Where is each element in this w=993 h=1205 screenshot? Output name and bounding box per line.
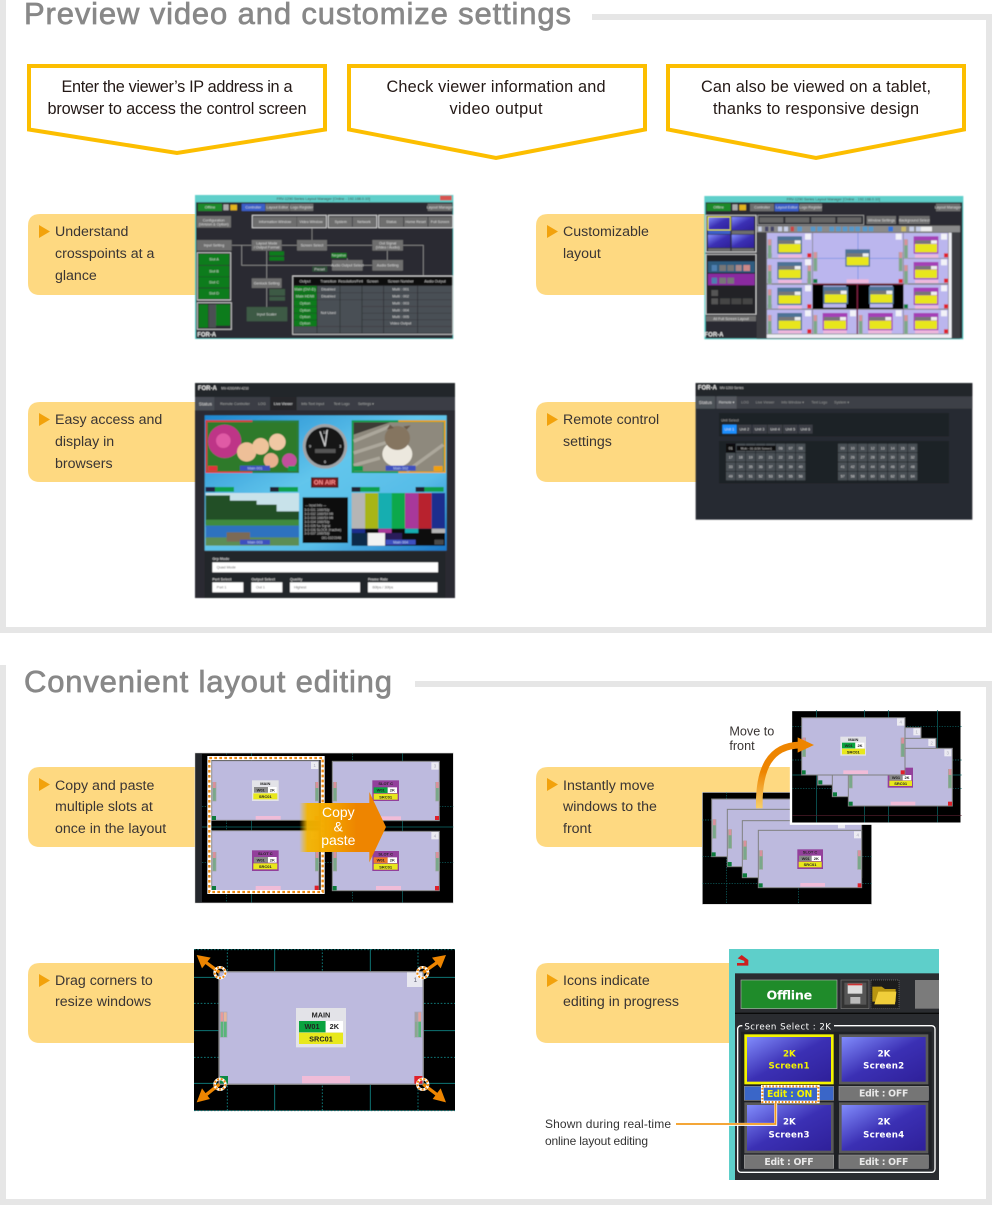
screenshot: remote control settings: 10 xyxy=(851,446,855,450)
screenshot: screen select with edit indicator: Screen Select : 2K xyxy=(744,1023,831,1033)
screenshot: remote control settings: 14 xyxy=(891,446,895,450)
screenshot: remote control settings: 29 xyxy=(881,456,885,460)
label: copy and paste xyxy=(28,767,210,847)
screenshot: move window to front: W01 xyxy=(802,856,811,861)
screenshot: layout editor screen: Layout Manager xyxy=(935,206,962,210)
label: remote control: Remote control xyxy=(563,412,659,428)
screenshot: copy and paste slots: W01 xyxy=(377,788,386,793)
panel: layout editing section frame xyxy=(3,665,989,1202)
screenshot: move window to front xyxy=(702,710,962,904)
screenshot: remote control settings: 23 xyxy=(789,456,793,460)
screenshot: remote control settings: 15 xyxy=(901,446,905,450)
screenshot: layout editor screen: FRV-1290 Series Layout Manager [Online - 192.168.0.10] xyxy=(787,197,880,201)
label: easy access: browsers xyxy=(55,456,113,472)
label: icons indicate editing: Icons indicate xyxy=(563,973,650,989)
screenshot: controller crosspoint screen: Status xyxy=(386,220,397,224)
screenshot: remote control settings: Unit 4 xyxy=(770,428,780,432)
screenshot: copy and paste slots: Copy xyxy=(322,804,355,820)
screenshot: controller crosspoint screen: Main (DVI-D) xyxy=(294,288,316,292)
screenshot: controller crosspoint screen: Preset xyxy=(314,267,325,271)
screenshot: browser live viewer: Remote Controller xyxy=(220,402,251,406)
screenshot: remote control settings: 42 xyxy=(851,465,855,469)
screenshot: browser live viewer: Port 1 xyxy=(217,586,226,590)
screenshot: controller crosspoint screen: Logo Register xyxy=(290,206,314,210)
screenshot: remote control settings: 07 xyxy=(789,446,793,450)
screenshot: move window to front: 2K xyxy=(814,856,819,861)
label: copy and paste: Copy and paste xyxy=(55,778,154,794)
screenshot: controller crosspoint screen: Controller xyxy=(245,206,262,210)
screenshot: controller crosspoint screen: Option xyxy=(300,302,310,306)
screenshot: controller crosspoint screen: Video Output xyxy=(390,322,411,326)
screenshot: controller crosspoint screen: Slot D xyxy=(209,292,219,296)
screenshot: copy and paste slots: 2K xyxy=(270,787,275,792)
screenshot: remote control settings: FOR-A xyxy=(698,386,717,392)
screenshot: copy and paste slots: SRC01 xyxy=(259,794,273,799)
screenshot: remote control settings: 21 xyxy=(769,456,773,460)
screenshot: controller crosspoint screen: / Output Format xyxy=(254,246,279,250)
callout: enter IP address: browser to access the control screen xyxy=(48,100,306,118)
screenshot: remote control settings: Live Viewer xyxy=(756,401,775,405)
screenshot: controller crosspoint screen: Audio Output xyxy=(424,280,446,284)
screenshot: controller crosspoint screen xyxy=(195,195,454,339)
screenshot: copy and paste slots: 4 xyxy=(434,833,437,838)
screenshot: remote control settings: 30 xyxy=(891,456,895,460)
screenshot: remote control settings: 62 xyxy=(891,474,895,478)
screenshot: browser live viewer: Settings ▾ xyxy=(358,402,374,406)
screenshot: remote control settings: 22 xyxy=(779,456,783,460)
screenshot: copy and paste slots: W01 xyxy=(257,857,266,862)
screenshot: browser live viewer: FOR-A xyxy=(198,386,217,392)
screenshot: remote control settings: 11 xyxy=(861,446,865,450)
callout: check viewer information: Check viewer information and xyxy=(386,78,606,96)
screenshot: controller crosspoint screen: Full Screen xyxy=(431,220,449,224)
screenshot: browser live viewer: ON AIR xyxy=(314,480,336,487)
label: understand crosspoints xyxy=(28,214,210,295)
label: icons indicate editing xyxy=(536,963,740,1043)
screenshot: copy and paste slots: SLOT C xyxy=(378,781,393,786)
screenshot: remote control settings: 08 xyxy=(799,446,803,450)
screenshot: controller crosspoint screen: Audio Output Select xyxy=(331,264,364,268)
label: instantly move windows: Instantly move xyxy=(563,778,655,794)
screenshot: remote control settings: Unit 6 xyxy=(801,428,810,432)
screenshot: browser live viewer: Quality xyxy=(290,577,303,581)
screenshot: copy and paste slots: SRC01 xyxy=(379,864,393,869)
screenshot: drag corners to resize: W01 xyxy=(304,1022,320,1031)
screenshot: remote control settings: 36 xyxy=(759,465,763,469)
screenshot: controller crosspoint screen: Slot B xyxy=(209,269,219,273)
screenshot: remote control settings: 54 xyxy=(779,474,783,478)
screenshot: controller crosspoint screen: Multi : 003 xyxy=(392,302,409,306)
screenshot: browser live viewer: Status xyxy=(199,401,213,406)
screenshot: copy and paste slots: SLOT C xyxy=(258,851,273,856)
screenshot: remote control settings: 44 xyxy=(871,465,875,469)
screenshot: remote control settings: 55 xyxy=(789,474,793,478)
screenshot: move window to front: SRC01 xyxy=(804,862,817,867)
screenshot: drag corners to resize: MAIN xyxy=(312,1010,330,1019)
screenshot: screen select with edit indicator: Screen2 xyxy=(863,1061,904,1071)
screenshot: screen select with edit indicator: Edit : OFF xyxy=(764,1157,814,1168)
screenshot: remote control settings xyxy=(696,383,972,520)
screenshot: remote control settings: 31 xyxy=(901,456,905,460)
screenshot: move window to front: 2K xyxy=(857,743,863,748)
screenshot: controller crosspoint screen: FOR-A xyxy=(197,333,217,339)
screenshot: controller crosspoint screen: Multi : 005 xyxy=(392,315,409,319)
screenshot: remote control settings: 35 xyxy=(749,465,753,469)
screenshot: remote control settings: 58 xyxy=(851,474,855,478)
screenshot: layout editor screen: Offline xyxy=(713,206,724,210)
screenshot: move window to front: 3 xyxy=(946,751,949,756)
screenshot: remote control settings: 57 xyxy=(841,474,845,478)
screenshot: remote control settings: 59 xyxy=(861,474,865,478)
screenshot: screen select with edit indicator: Edit : OFF xyxy=(859,1157,908,1168)
screenshot: screen select with edit indicator: Screen3 xyxy=(768,1130,809,1140)
screenshot: browser live viewer: Text Logo xyxy=(334,402,350,406)
screenshot: screen select with edit indicator: Edit : ON xyxy=(767,1089,812,1100)
screenshot: layout editor screen: Background Select xyxy=(899,218,930,222)
screenshot: drag corners to resize: 1 xyxy=(413,977,417,984)
screenshot: copy and paste slots: W01 xyxy=(377,858,386,863)
screenshot: remote control settings: 19 xyxy=(749,456,753,460)
label: drag corners: Drag corners to xyxy=(55,973,153,989)
screenshot: remote control settings: Text Logo xyxy=(811,401,827,405)
screenshot: controller crosspoint screen: Option xyxy=(300,315,310,319)
screenshot: remote control settings: 53 xyxy=(769,474,773,478)
screenshot: screen select with edit indicator: 2K xyxy=(783,1118,796,1128)
label: remote control xyxy=(536,402,720,482)
screenshot: remote control settings: 13 xyxy=(881,446,885,450)
screenshot: browser live viewer: 001-002/2048 xyxy=(322,536,341,540)
screenshot: browser live viewer: Output Select xyxy=(251,577,276,581)
screenshot: layout editor screen: Window Settings xyxy=(868,218,895,222)
screenshot: remote control settings: 38 xyxy=(779,465,783,469)
screenshot: remote control settings: 28 xyxy=(871,456,875,460)
screenshot: copy and paste slots: 2K xyxy=(390,858,395,863)
screenshot: remote control settings: 61 xyxy=(881,474,885,478)
screenshot: screen select with edit indicator: 2K xyxy=(783,1050,796,1060)
screenshot: remote control settings: 60 xyxy=(871,474,875,478)
screenshot: remote control settings: Status xyxy=(699,400,713,405)
label: understand crosspoints: glance xyxy=(55,268,97,284)
screenshot: move window to front: 2K xyxy=(904,775,910,780)
screenshot: screen select with edit indicator: 2K xyxy=(878,1118,891,1128)
screenshot: remote control settings: 09 xyxy=(841,446,845,450)
screenshot: drag corners to resize: SRC01 xyxy=(309,1035,333,1044)
label: easy access: display in xyxy=(55,434,114,450)
screenshot: browser live viewer: 6 xyxy=(324,460,326,464)
screenshot: move window to front: 4 xyxy=(856,832,859,837)
screenshot: copy and paste slots: 2K xyxy=(270,857,275,862)
screenshot: move window to front: 1 xyxy=(915,730,918,735)
screenshot: controller crosspoint screen: Screen Select xyxy=(301,244,323,248)
screenshot: copy and paste slots: W01 xyxy=(257,787,266,792)
screenshot: browser live viewer: 60fps / 30fps xyxy=(372,586,393,590)
screenshot: browser live viewer: --- Input Info --- xyxy=(305,504,326,508)
screenshot: remote control settings: 32 xyxy=(911,456,915,460)
screenshot: browser live viewer: 3-G 007 1080/50p xyxy=(304,532,330,536)
screenshot: copy and paste slots xyxy=(195,753,453,903)
screenshot: controller crosspoint screen: Disabled xyxy=(321,295,335,299)
screenshot: controller crosspoint screen: (Version & Option) xyxy=(199,222,229,226)
screenshot: browser live viewer: Grp Mode xyxy=(212,557,229,561)
screenshot: screen select with edit indicator: 2K xyxy=(878,1050,891,1060)
screenshot: layout editor screen: Controller xyxy=(754,206,771,210)
screenshot: controller crosspoint screen: Input Scaler xyxy=(257,312,277,316)
screenshot: controller crosspoint screen: Screen xyxy=(367,280,378,284)
screenshot: screen select with edit indicator: Screen1 xyxy=(768,1061,809,1071)
screenshot: screen select with edit indicator: Offline xyxy=(766,988,812,1003)
screenshot: move window to front: SLOT C xyxy=(803,850,817,855)
screenshot: layout editor screen: All Full Screen Layout xyxy=(713,317,749,321)
screenshot: remote control settings: 43 xyxy=(861,465,865,469)
screenshot: screen select with edit indicator xyxy=(675,949,939,1180)
annotation: real-time online editing: online layout editing xyxy=(545,1134,648,1148)
screenshot: remote control settings: 37 xyxy=(769,465,773,469)
screenshot: controller crosspoint screen: Layout Manager xyxy=(427,206,454,210)
screenshot: controller crosspoint screen: Information Window xyxy=(259,220,292,224)
screenshot: remote control settings: 56 xyxy=(799,474,803,478)
screenshot: controller crosspoint screen: Offline xyxy=(205,206,215,210)
screenshot: controller crosspoint screen: Layout Mode xyxy=(256,242,277,246)
screenshot: controller crosspoint screen: Output xyxy=(300,280,310,284)
screenshot: controller crosspoint screen: FRV-1290 Series Layout Manager [Online - 192.168.0.10] xyxy=(277,197,370,201)
screenshot: remote control settings: 20 xyxy=(759,456,763,460)
label: copy and paste: multiple slots at xyxy=(55,799,153,815)
screenshot: move window to front: front xyxy=(729,739,755,753)
screenshot: copy and paste slots: MAIN xyxy=(260,781,271,786)
label: understand crosspoints: crosspoints at a xyxy=(55,246,154,262)
screenshot: controller crosspoint screen: Negative xyxy=(332,254,346,258)
screenshot: copy and paste slots: SRC01 xyxy=(259,864,273,869)
screenshot: controller crosspoint screen: Multi : 002 xyxy=(392,295,409,299)
screenshot: browser live viewer: Main 001 xyxy=(247,467,263,471)
callout: tablet responsive design xyxy=(668,66,964,158)
screenshot: remote control settings: 45 xyxy=(881,465,885,469)
screenshot: remote control settings: Unit 1 xyxy=(725,428,734,432)
screenshot: remote control settings: Remote ▾ xyxy=(719,401,735,405)
screenshot: remote control settings: MV-1200 Series xyxy=(720,386,744,390)
screenshot: controller crosspoint screen: Configuration xyxy=(203,218,225,222)
screenshot: controller crosspoint screen: Option xyxy=(300,308,310,312)
callout: enter IP address xyxy=(29,66,325,153)
screenshot: browser live viewer: Port Select xyxy=(212,577,232,581)
screenshot: browser live viewer: 12 xyxy=(323,431,327,435)
screenshot: remote control settings: 49 xyxy=(729,474,733,478)
screenshot: move window to front: 2 xyxy=(930,740,933,745)
screenshot: remote control settings: 25 xyxy=(841,456,845,460)
screenshot: remote control settings: Unit 2 xyxy=(740,428,749,432)
callout: tablet responsive design: thanks to responsive design xyxy=(713,100,919,118)
screenshot: controller crosspoint screen: Audio Setting xyxy=(377,264,399,268)
screenshot: remote control settings: Unit 5 xyxy=(786,428,795,432)
screenshot: browser live viewer: Quad Mode xyxy=(217,566,236,570)
screenshot: layout editor screen: FOR-A xyxy=(705,333,724,339)
screenshot: controller crosspoint screen: Home Reset xyxy=(406,220,426,224)
screenshot: browser live viewer: LOG xyxy=(258,402,266,406)
screenshot: remote control settings: Info Window ▾ xyxy=(781,401,804,405)
label: copy and paste: once in the layout xyxy=(55,821,166,837)
screenshot: remote control settings: 06 xyxy=(779,446,783,450)
screenshot: move window to front: MAIN xyxy=(848,737,859,742)
screenshot: copy and paste slots: 3 xyxy=(434,764,437,769)
screenshot: remote control settings: 64 xyxy=(911,474,915,478)
screenshot: remote control settings: 27 xyxy=(861,456,865,460)
screenshot: move window to front: Move to xyxy=(729,725,774,739)
callout: tablet responsive design: Can also be viewed on a tablet, xyxy=(701,78,931,96)
screenshot: browser live viewer: 3 xyxy=(339,445,341,449)
callout: check viewer information xyxy=(349,66,645,158)
screenshot: controller crosspoint screen: Input Setting xyxy=(204,244,224,248)
label: drag corners: resize windows xyxy=(55,994,151,1010)
screenshot: browser live viewer: Main 004 xyxy=(393,541,408,545)
callout: enter IP address: Enter the viewer’s IP address in a xyxy=(62,78,293,96)
screenshot: controller crosspoint screen: Slot C xyxy=(209,280,219,284)
screenshot: browser live viewer: 3-G 006 SLOCK (Inactive) xyxy=(304,528,341,532)
label: instantly move windows xyxy=(536,767,790,847)
screenshot: remote control settings: System ▾ xyxy=(834,401,849,405)
screenshot: browser live viewer: Main 003 xyxy=(247,541,263,545)
screenshot: move window to front: 4 xyxy=(899,720,902,725)
screenshot: remote control settings: 12 xyxy=(871,446,875,450)
screenshot: remote control settings: 63 xyxy=(901,474,905,478)
screenshot: layout editor screen xyxy=(704,196,963,339)
screenshot: controller crosspoint screen: Layout Editor xyxy=(267,206,289,210)
screenshot: remote control settings: 40 xyxy=(799,465,803,469)
screenshot: remote control settings: 50 xyxy=(739,474,743,478)
label: customizable layout xyxy=(536,214,720,295)
screenshot: browser live viewer: 3-G 005 No Signal xyxy=(304,524,331,528)
screenshot: remote control settings: 52 xyxy=(759,474,763,478)
screenshot: layout editor screen: Logo Register xyxy=(799,206,823,210)
screenshot: remote control settings: 18 xyxy=(739,456,743,460)
screenshot: controller crosspoint screen: System xyxy=(335,220,347,224)
screenshot: browser live viewer: Highest xyxy=(294,586,306,590)
screenshot: copy and paste slots: 2K xyxy=(390,788,395,793)
screenshot: controller crosspoint screen: Main HDMI xyxy=(296,295,314,299)
screenshot: screen select with edit indicator: Edit : OFF xyxy=(859,1089,908,1100)
screenshot: remote control settings: 48 xyxy=(911,465,915,469)
screenshot: drag corners to resize xyxy=(194,949,455,1111)
screenshot: remote control settings: 47 xyxy=(901,465,905,469)
screenshot: controller crosspoint screen: Multi : 004 xyxy=(392,308,409,312)
screenshot: controller crosspoint screen: Multi : 001 xyxy=(392,288,409,292)
screenshot: remote control settings: LOG xyxy=(741,401,749,405)
screenshot: browser live viewer: Out 1 xyxy=(256,586,265,590)
screenshot: remote control settings: 26 xyxy=(851,456,855,460)
screenshot: controller crosspoint screen: Transition xyxy=(320,280,336,284)
screenshot: copy and paste slots: 1 xyxy=(313,763,316,768)
screenshot: browser live viewer: Info Text Input xyxy=(301,402,324,406)
heading: layout editing: Convenient layout editing xyxy=(24,664,392,699)
screenshot: controller crosspoint screen: Option xyxy=(300,322,310,326)
label: customizable layout: layout xyxy=(563,246,601,262)
screenshot: copy and paste slots: SRC01 xyxy=(379,794,393,799)
screenshot: drag corners to resize: 2K xyxy=(330,1022,340,1031)
screenshot: screen select with edit indicator: Screen4 xyxy=(863,1130,904,1140)
screenshot: remote control settings: Unit 3 xyxy=(755,428,764,432)
label: icons indicate editing: editing in progress xyxy=(563,994,679,1010)
label: remote control: settings xyxy=(563,434,612,450)
label: drag corners xyxy=(28,963,210,1043)
annotation: real-time online editing xyxy=(545,1103,776,1148)
screenshot: remote control settings: 46 xyxy=(891,465,895,469)
screenshot: browser live viewer: Live Viewer xyxy=(274,402,294,406)
label: easy access xyxy=(28,402,210,482)
screenshot: remote control settings: Multi - 01 (1/16 Screen) xyxy=(741,446,772,450)
screenshot: remote control settings: 41 xyxy=(841,465,845,469)
screenshot: move window to front: SRC01 xyxy=(894,781,908,786)
screenshot: copy and paste slots: 2 xyxy=(313,833,316,838)
panel: preview section frame xyxy=(3,0,989,630)
screenshot: move window to front: W01 xyxy=(892,775,901,780)
screenshot: remote control settings: 16 xyxy=(911,446,915,450)
screenshot: remote control settings: 24 xyxy=(799,456,803,460)
screenshot: browser live viewer: 3-G 002 1080/59.94i xyxy=(304,512,333,516)
screenshot: controller crosspoint screen: Slot A xyxy=(209,258,219,262)
label: instantly move windows: front xyxy=(563,821,591,837)
screenshot: controller crosspoint screen: Disabled xyxy=(321,288,335,292)
screenshot: move window to front: W01 xyxy=(845,743,854,748)
screenshot: browser live viewer xyxy=(195,383,455,598)
label: easy access: Easy access and xyxy=(55,412,162,428)
screenshot: browser live viewer: Main 002 xyxy=(393,467,408,471)
screenshot: browser live viewer: Frame Rate xyxy=(368,577,388,581)
screenshot: controller crosspoint screen: Not Used xyxy=(321,311,336,315)
screenshot: browser live viewer: 3-G 003 1080/59.94i xyxy=(304,516,333,520)
screenshot: browser live viewer: MV-4200/MV-4210 xyxy=(221,386,249,390)
screenshot: remote control settings: Unit Select xyxy=(721,419,739,423)
screenshot: remote control settings: 33 xyxy=(729,465,733,469)
annotation: real-time online editing: Shown during real-time xyxy=(545,1117,671,1131)
screenshot: move window to front: SRC01 xyxy=(847,749,861,754)
screenshot: controller crosspoint screen: (Video / Audio) xyxy=(376,246,400,250)
screenshot: controller crosspoint screen: Screen Number xyxy=(388,280,414,284)
screenshot: copy and paste slots: paste xyxy=(321,832,356,848)
screenshot: browser live viewer: 3-G 001 1080/50p xyxy=(304,508,330,512)
screenshot: controller crosspoint screen: Out Signal xyxy=(379,242,396,246)
label: instantly move windows: windows to the xyxy=(562,799,657,815)
callout: check viewer information: video output xyxy=(450,100,543,118)
screenshot: controller crosspoint screen: Genlock Setting xyxy=(254,281,280,285)
screenshot: layout editor screen: Layout Editor xyxy=(776,206,798,210)
screenshot: controller crosspoint screen: Video Window xyxy=(299,220,323,224)
screenshot: remote control settings: 51 xyxy=(749,474,753,478)
label: understand crosspoints: Understand xyxy=(55,224,128,240)
screenshot: browser live viewer: 3-G 004 1080/50p xyxy=(304,520,330,524)
screenshot: controller crosspoint screen: Resolution/Fmt xyxy=(338,280,363,284)
label: customizable layout: Customizable xyxy=(563,224,649,240)
screenshot: remote control settings: 39 xyxy=(789,465,793,469)
screenshot: remote control settings: 17 xyxy=(729,456,733,460)
screenshot: copy and paste slots: SLOT C xyxy=(378,852,393,857)
screenshot: remote control settings: 34 xyxy=(739,465,743,469)
screenshot: controller crosspoint screen: Network xyxy=(357,220,371,224)
screenshot: copy and paste slots: & xyxy=(334,818,344,834)
screenshot: browser live viewer: 9 xyxy=(309,445,311,449)
screenshot: remote control settings: 01 xyxy=(729,446,733,450)
